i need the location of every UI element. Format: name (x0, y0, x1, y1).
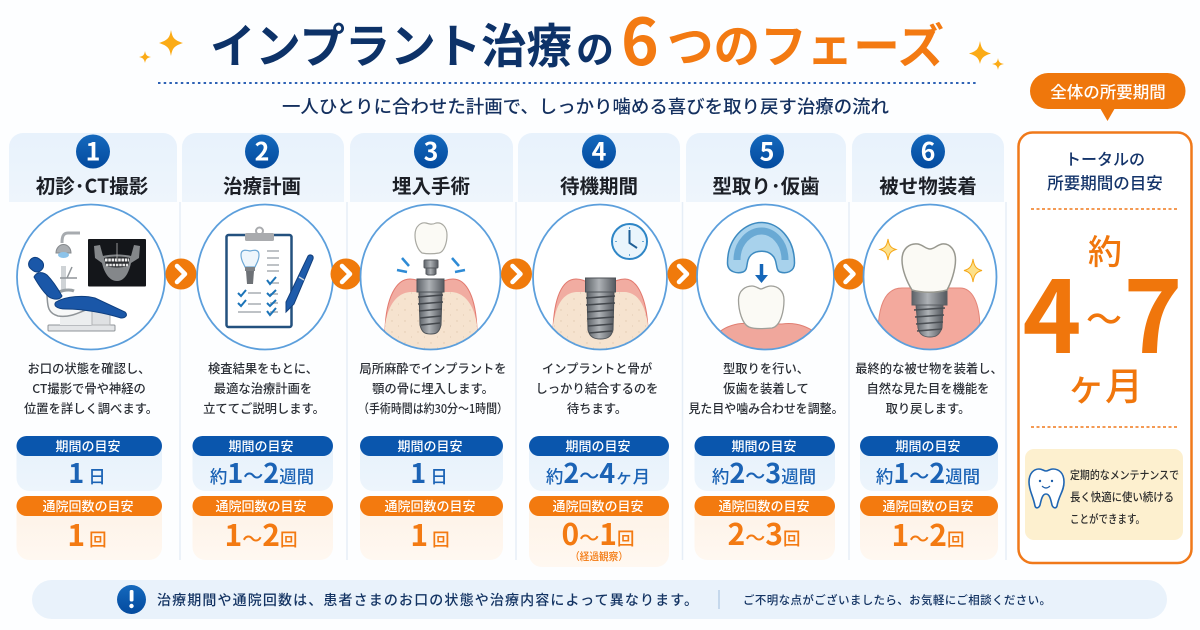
total value: 4 (1022, 237, 1082, 382)
panel: footer notice: ご不明な点がございましたら、お気軽にご相談ください。 (743, 592, 1051, 608)
subtitle: 一人ひとりに合わせた計画で、しっかり噛める喜びを取り戻す治療の流れ (282, 93, 889, 119)
description 3: （手術時間は約30分～1時間） (358, 399, 508, 417)
arrow 3 (501, 258, 532, 290)
description 5: 型取りを行い、 (723, 359, 809, 377)
description 1: 位置を詳しく調べます。 (24, 399, 158, 417)
header 3 (350, 132, 513, 202)
description 4 (536, 359, 658, 417)
duration 6: 期間の目安 (895, 436, 961, 455)
visits 5 (694, 496, 835, 560)
duration 5 (694, 436, 835, 491)
visits 4: 0～1回 (562, 510, 634, 554)
icon: sparkles left (139, 30, 183, 63)
description 6 (855, 359, 1003, 417)
duration 5: 約2～3週間 (712, 452, 816, 491)
header 5 (686, 132, 846, 202)
panel: phase 6 (852, 132, 1004, 560)
column separators (180, 202, 1006, 560)
title: インプラント治療 (210, 8, 572, 77)
visits 4: 通院回数の目安 (552, 496, 644, 515)
description 3 (358, 359, 508, 417)
visits 6 (860, 496, 998, 560)
description 5: 仮歯を装着して (723, 379, 809, 397)
duration 2: 約1～2週間 (210, 452, 314, 491)
maintenance note (1025, 449, 1183, 540)
panel: phase 3 (350, 132, 513, 560)
visits 2: 1～2回 (225, 511, 297, 555)
duration 3 (360, 436, 503, 491)
callout: total period bubble: 全体の所要期間 (1050, 79, 1166, 103)
description 2 (203, 359, 325, 417)
header 6 (852, 132, 1004, 202)
header 2: 治療計画 (223, 170, 301, 199)
duration 6 (860, 436, 998, 491)
callout: total period bubble (1030, 73, 1186, 121)
illustration: healing period with clock (533, 204, 667, 352)
description 4: しっかり結合するのを (536, 379, 658, 397)
duration 4 (529, 436, 669, 491)
title divider (158, 82, 977, 84)
icon: sparkles right (969, 41, 1004, 70)
header 6: 被せ物装着 (879, 170, 977, 199)
duration 4: 約2～4ヶ月 (546, 452, 650, 491)
title (210, 0, 944, 84)
description 3: 局所麻酔でインプラントを (359, 359, 507, 377)
total value: ヶ月 (1067, 356, 1143, 411)
visits 1 (16, 496, 162, 560)
total heading (1047, 146, 1163, 194)
header 2 (182, 132, 344, 202)
description 2: 検査結果をもとに、 (208, 359, 318, 377)
visits 6: 通院回数の目安 (882, 496, 974, 515)
header 4: 4 (592, 132, 607, 168)
visits 6: 1～2回 (892, 511, 964, 555)
arrow 4 (668, 258, 698, 290)
visits 4 (529, 496, 669, 567)
duration 5: 期間の目安 (731, 436, 797, 455)
total heading: 所要期間の目安 (1047, 170, 1163, 194)
header 5: 型取り･仮歯 (712, 170, 820, 199)
description 6: 最終的な被せ物を装着し、 (855, 359, 1003, 377)
duration 4: 期間の目安 (565, 436, 631, 455)
header 4: 待機期間 (560, 170, 638, 199)
header 3: 3 (424, 132, 438, 168)
icon: smiling tooth (1029, 469, 1064, 508)
header 1: 1 (86, 132, 100, 168)
visits 1: 通院回数の目安 (42, 496, 134, 515)
visits 5: 通院回数の目安 (718, 496, 810, 515)
description 6: 自然な見た目を機能を (867, 379, 989, 397)
duration 1 (16, 436, 162, 491)
visits 1: 1回 (67, 511, 107, 555)
duration 2: 期間の目安 (228, 436, 294, 455)
visits 4: （経過観察） (570, 549, 628, 564)
panel: phase 2 (182, 132, 344, 560)
description 2: 立ててご説明します。 (203, 399, 325, 417)
panel: phase 4 (518, 132, 680, 567)
title: つのフェーズ (667, 8, 944, 77)
total heading: トータルの (1065, 146, 1145, 170)
icon: exclamation (117, 585, 146, 614)
panel: footer notice (32, 580, 1167, 619)
arrow 5 (834, 258, 865, 290)
panel: footer notice: 治療期間や通院回数は、患者さまのお口の状態や治療内容によって異なります。 (157, 590, 698, 610)
header 5: 5 (760, 132, 774, 168)
total value: 約 (1088, 225, 1122, 274)
visits 2: 通院回数の目安 (215, 496, 307, 515)
illustration: finished crown (864, 204, 996, 352)
duration 3: 期間の目安 (397, 436, 463, 455)
visits 2 (192, 496, 333, 560)
illustration: clipboard (197, 204, 333, 350)
header 1: 初診･CT撮影 (36, 170, 149, 199)
maintenance note: 長く快適に使い続ける (1070, 489, 1174, 505)
header 2: 2 (255, 132, 269, 168)
panel: phase 1 (9, 132, 177, 560)
duration 6: 約1～2週間 (876, 452, 980, 491)
duration 2 (192, 436, 333, 491)
duration 3: 1日 (410, 452, 448, 491)
description 4: インプラントと骨が (542, 359, 653, 377)
illustration: impression tray and temporary tooth (697, 204, 834, 352)
visits 5: 2～3回 (728, 510, 800, 554)
description 5: 見た目や噛み合わせを調整。 (688, 399, 844, 417)
visits 3: 通院回数の目安 (384, 496, 476, 515)
duration 1: 1日 (68, 452, 106, 491)
total value (1022, 225, 1182, 411)
header 3: 埋入手術 (392, 170, 470, 199)
total value: 7 (1124, 237, 1182, 382)
maintenance note: 定期的なメンテナンスで (1070, 467, 1179, 483)
duration 1: 期間の目安 (55, 436, 121, 455)
header 6: 6 (921, 132, 935, 168)
maintenance note: ことができます。 (1070, 511, 1145, 527)
description 1: CT撮影で骨や神経の (32, 379, 146, 397)
description 5 (688, 359, 844, 417)
illustration: implant surgery (360, 204, 500, 352)
header 1 (9, 132, 177, 202)
arrow 2 (330, 258, 362, 290)
title: の (576, 19, 614, 74)
total value: ～ (1086, 291, 1122, 343)
header 4 (518, 132, 680, 202)
visits 3: 1回 (410, 511, 450, 555)
description 6: 取り戻します。 (886, 399, 970, 417)
description 2: 最適な治療計画を (214, 379, 312, 397)
description 1: お口の状態を確認し、 (28, 359, 150, 377)
description 1 (24, 359, 158, 417)
arrow 1 (166, 258, 196, 290)
description 4: 待ちます。 (567, 399, 627, 417)
panel: phase 5 (686, 132, 846, 560)
description 3: 顎の骨に埋入します。 (372, 379, 494, 397)
visits 3 (360, 496, 503, 560)
panel: total period (1018, 132, 1192, 563)
illustration: dental chair and x-ray (17, 204, 165, 350)
